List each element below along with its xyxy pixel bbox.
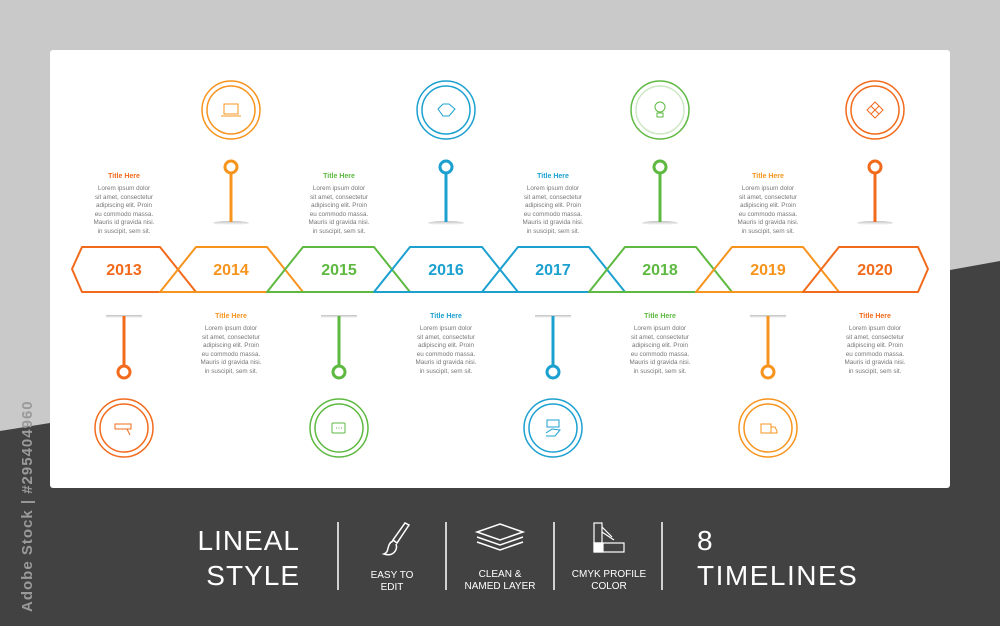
text blocks bottom: Lorem ipsum dolor (420, 325, 472, 332)
year labels: 2016 (428, 262, 464, 279)
feature text: easy to edit (371, 570, 414, 593)
text blocks top: Title Here (752, 173, 784, 180)
text blocks bottom: Lorem ipsum dolor (849, 325, 901, 332)
text blocks bottom: in suscipit, sem sit. (849, 368, 902, 375)
text blocks bottom: eu commodo massa. (417, 351, 475, 358)
feature text: cmyk: COLOR (591, 581, 627, 592)
text blocks top: adipiscing elit. Proin (525, 202, 581, 209)
text blocks top: Mauris id gravida nisi. (94, 219, 155, 226)
footer heading: lineal style (198, 525, 300, 591)
year labels: 2020 (857, 262, 893, 279)
panel: white card (50, 50, 950, 488)
text blocks bottom: sit amet, consectetur (417, 334, 475, 341)
bottom pins (106, 315, 786, 378)
feature text: easy to edit: EDIT (381, 582, 403, 593)
year labels: 2017 (535, 262, 571, 279)
text blocks top: Mauris id gravida nisi. (523, 219, 584, 226)
text blocks top: in suscipit, sem sit. (742, 228, 795, 235)
text blocks bottom: Mauris id gravida nisi. (416, 359, 477, 366)
year labels: 2015 (321, 262, 357, 279)
text blocks bottom: Title Here (859, 313, 891, 320)
text blocks top: in suscipit, sem sit. (527, 228, 580, 235)
text blocks bottom: Title Here (215, 313, 247, 320)
text blocks top: Title Here (323, 173, 355, 180)
text blocks top: eu commodo massa. (95, 211, 153, 218)
text blocks bottom: sit amet, consectetur (202, 334, 260, 341)
text blocks bottom: Mauris id gravida nisi. (201, 359, 262, 366)
feature text: clean layer (465, 569, 535, 592)
text blocks bottom: sit amet, consectetur (846, 334, 904, 341)
footer heading: lineal style: STYLE (206, 560, 300, 591)
text blocks bottom: Mauris id gravida nisi. (630, 359, 691, 366)
watermark id: Adobe Stock | #295404960 (19, 400, 36, 612)
icon circles bottom (95, 399, 797, 457)
year labels: 2018 (642, 262, 678, 279)
text blocks top: eu commodo massa. (524, 211, 582, 218)
text blocks bottom (201, 313, 906, 375)
feature text: clean layer: CLEAN & (479, 569, 522, 580)
text blocks bottom: Title Here (430, 313, 462, 320)
footer heading: 8 timelines: 8 (697, 525, 714, 556)
text blocks top: Lorem ipsum dolor (527, 185, 579, 192)
text blocks bottom: adipiscing elit. Proin (632, 342, 688, 349)
text blocks bottom: Lorem ipsum dolor (634, 325, 686, 332)
icon: brush (384, 523, 409, 555)
text blocks top: Mauris id gravida nisi. (738, 219, 799, 226)
year labels: 2013 (106, 262, 142, 279)
text blocks top: adipiscing elit. Proin (740, 202, 796, 209)
text blocks top: sit amet, consectetur (310, 194, 368, 201)
text blocks bottom: in suscipit, sem sit. (205, 368, 258, 375)
feature text: cmyk (572, 569, 647, 592)
text blocks top: eu commodo massa. (739, 211, 797, 218)
text blocks top: adipiscing elit. Proin (311, 202, 367, 209)
footer heading: 8 timelines: TIMELINES (697, 560, 858, 591)
text blocks bottom: Title Here (644, 313, 676, 320)
text blocks bottom: in suscipit, sem sit. (420, 368, 473, 375)
text blocks top (94, 173, 799, 235)
text blocks bottom: adipiscing elit. Proin (203, 342, 259, 349)
icon: layers (477, 524, 523, 550)
text blocks top: in suscipit, sem sit. (313, 228, 366, 235)
text blocks top: Title Here (537, 173, 569, 180)
text blocks top: Mauris id gravida nisi. (309, 219, 370, 226)
year labels (106, 262, 893, 279)
feature text: cmyk: CMYK PROFILE (572, 569, 647, 580)
text blocks bottom: adipiscing elit. Proin (847, 342, 903, 349)
text blocks bottom: eu commodo massa. (846, 351, 904, 358)
text blocks bottom: eu commodo massa. (631, 351, 689, 358)
timeline chain (72, 247, 928, 292)
footer heading: lineal style: LINEAL (198, 525, 300, 556)
text blocks top: sit amet, consectetur (95, 194, 153, 201)
year labels: 2014 (213, 262, 249, 279)
text blocks top: adipiscing elit. Proin (96, 202, 152, 209)
icon circles top (202, 81, 904, 139)
text blocks top: Lorem ipsum dolor (98, 185, 150, 192)
text blocks bottom: in suscipit, sem sit. (634, 368, 687, 375)
text blocks bottom: Lorem ipsum dolor (205, 325, 257, 332)
text blocks top: sit amet, consectetur (739, 194, 797, 201)
icon: swatches (594, 523, 624, 552)
text blocks top: eu commodo massa. (310, 211, 368, 218)
text blocks bottom: eu commodo massa. (202, 351, 260, 358)
feature text: easy to edit: EASY TO (371, 570, 414, 581)
text blocks bottom: adipiscing elit. Proin (418, 342, 474, 349)
text blocks top: in suscipit, sem sit. (98, 228, 151, 235)
text blocks top: Title Here (108, 173, 140, 180)
top pins (213, 161, 893, 225)
footer heading: 8 timelines (697, 525, 858, 591)
dividers (338, 522, 662, 590)
text blocks bottom: Mauris id gravida nisi. (845, 359, 906, 366)
text blocks top: Lorem ipsum dolor (313, 185, 365, 192)
feature text: clean layer: NAMED LAYER (465, 581, 535, 592)
text blocks top: Lorem ipsum dolor (742, 185, 794, 192)
text blocks bottom: sit amet, consectetur (631, 334, 689, 341)
text blocks top: sit amet, consectetur (524, 194, 582, 201)
year labels: 2019 (750, 262, 786, 279)
